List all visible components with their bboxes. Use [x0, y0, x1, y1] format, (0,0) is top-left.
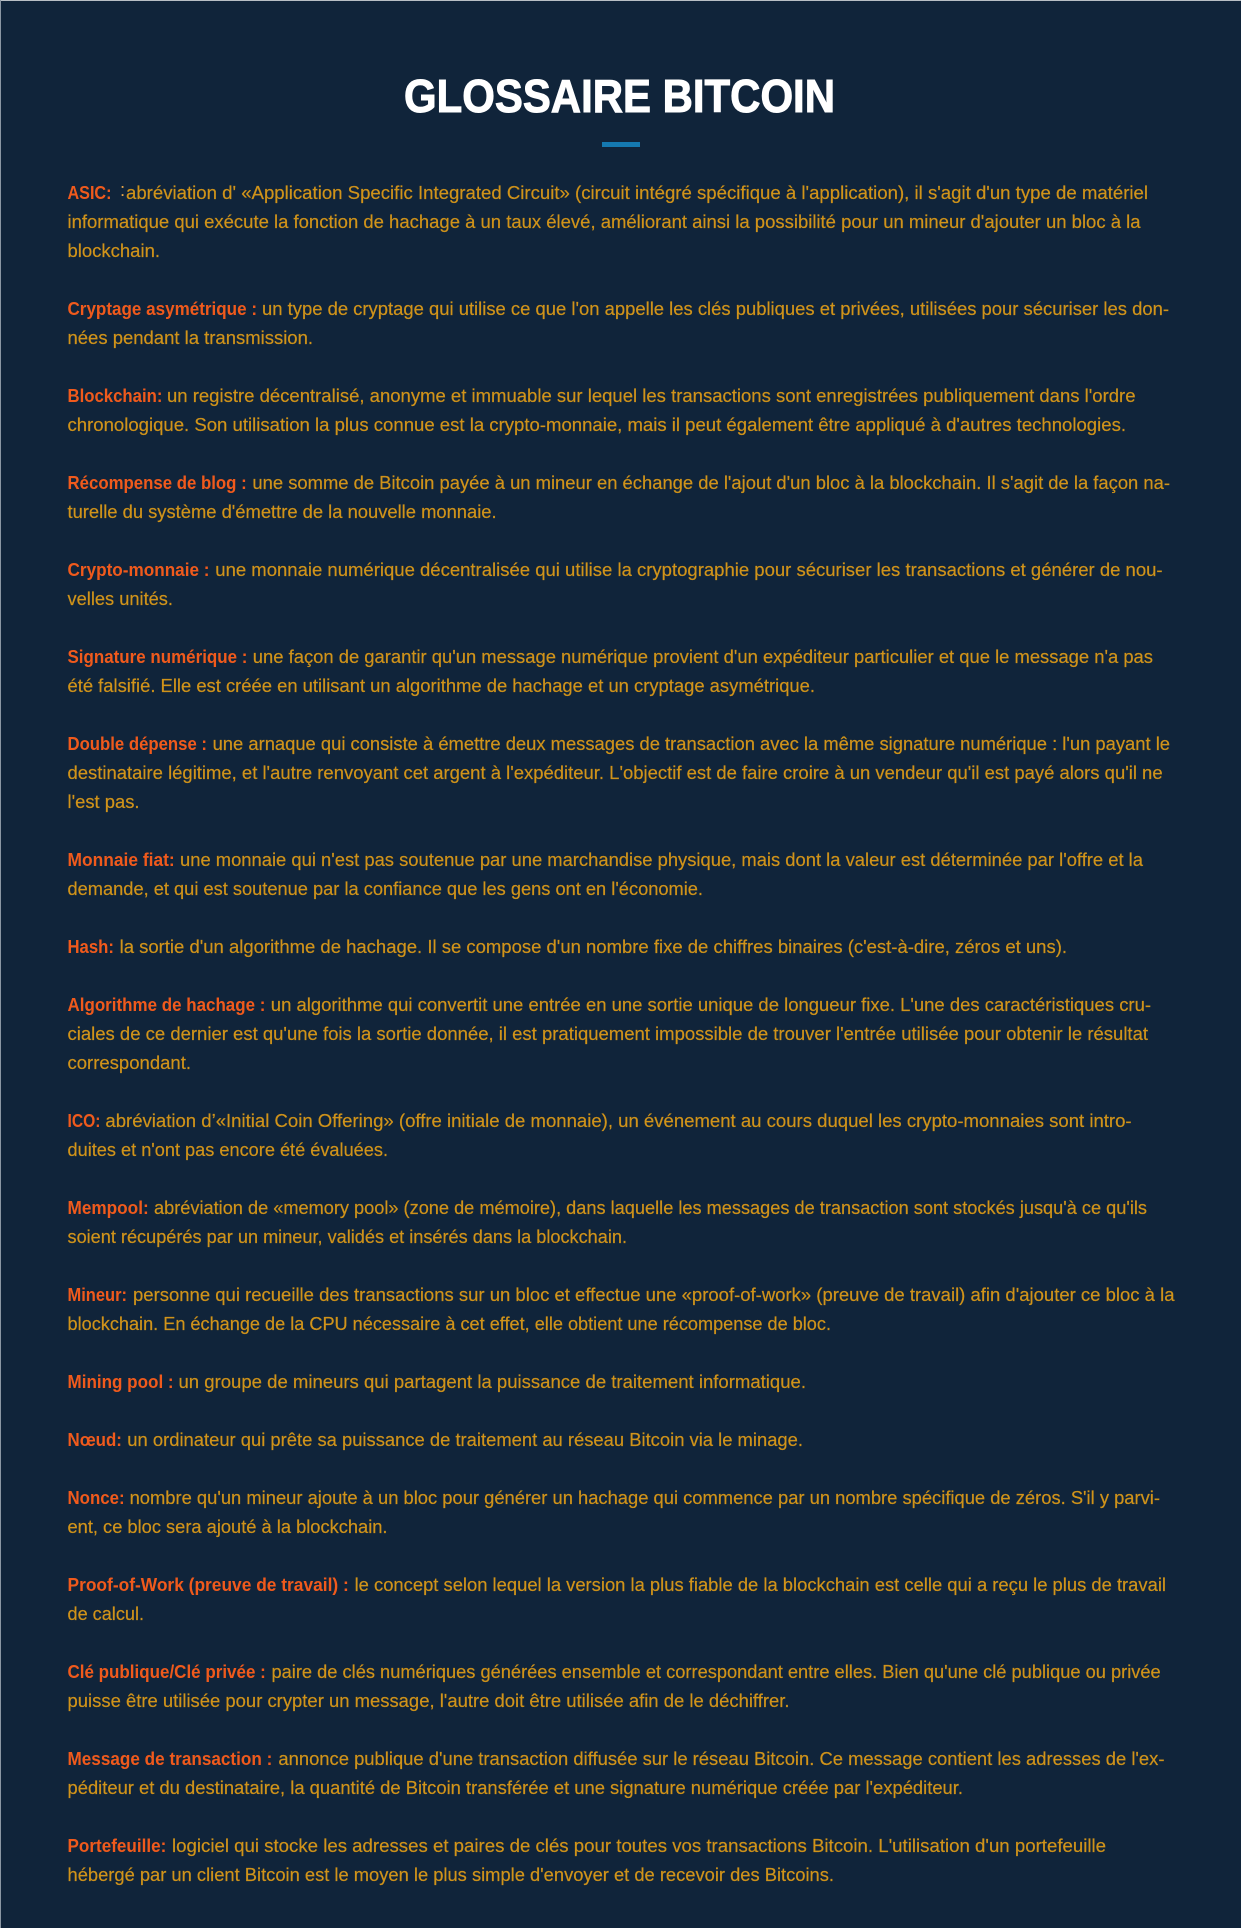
entry: Message de transaction: [68, 1748, 1164, 1798]
definition: Proof-of-Work: [68, 1574, 1166, 1624]
entry: Nœud: [68, 1429, 803, 1450]
definition: Signature numérique: une façon de garantir qu'un message numérique provient d'un expéditeur particulier et que le message n'a pas: [253, 646, 1153, 667]
term: Portefeuille: Portefeuille:: [68, 1835, 166, 1856]
definition: Récompense de blog: une somme de Bitcoin payée à un mineur en échange de l'ajout d'un bloc à la blockchain. Il s'agit de la façon na-: [252, 472, 1170, 493]
entry: Mining pool: [68, 1371, 806, 1392]
definition: Mineur: [68, 1284, 1175, 1334]
definition: Nœud: un ordinateur qui prête sa puissance de traitement au réseau Bitcoin via le minage.: [127, 1429, 803, 1450]
term: Blockchain: Blockchain:: [68, 385, 162, 406]
definition: Clé publique/Clé privée: paire de clés numériques générées ensemble et correspondant entre elles. Bien qu'une clé publique ou privée: [272, 1661, 1161, 1682]
definition: Blockchain: un registre décentralisé, anonyme et immuable sur lequel les transactions sont enregistrées publiquement dans l'ordre: [167, 385, 1136, 406]
term: Cryptage asymétrique: Cryptage asymétrique :: [68, 298, 257, 319]
definition: Récompense de blog: [68, 472, 1170, 522]
definition: Signature numérique: été falsifié. Elle est créée en utilisant un algorithme de hachage et un cryptage asymétrique.: [68, 675, 815, 696]
definition: Blockchain: chronologique. Son utilisation la plus connue est la crypto-monnaie, mais il peut également être appliqué à d'autres technologies.: [68, 414, 1126, 435]
definition: Nonce: ent, ce bloc sera ajouté à la blockchain.: [68, 1516, 388, 1537]
entry: Monnaie fiat: [68, 849, 1144, 899]
definition: ASIC: blockchain.: [68, 240, 160, 261]
definition: Monnaie fiat: une monnaie qui n'est pas soutenue par une marchandise physique, mais dont la valeur est déterminée par l'offre et la: [180, 849, 1144, 870]
definition: Cryptage asymétrique: un type de cryptage qui utilise ce que l'on appelle les clés publiques et privées, utilisées pour sécuriser les don-: [262, 298, 1169, 319]
definition: Portefeuille: [68, 1835, 1106, 1885]
definition: Double dépense: [68, 733, 1170, 812]
entry: Proof-of-Work: [68, 1574, 1166, 1624]
definition: Proof-of-Work: de calcul.: [68, 1603, 144, 1624]
definition: ASIC: abréviation d' «Application Specific Integrated Circuit» (circuit intégré spécifique à l'application), il s'agit d'un type de matériel: [126, 182, 1148, 203]
definition: Message de transaction: annonce publique d'une transaction diffusée sur le réseau Bitcoin. Ce message contient les adresses de l'ex-: [278, 1748, 1164, 1769]
entry: Portefeuille: [68, 1835, 1106, 1885]
entry: ICO: [68, 1110, 1132, 1160]
definition: Signature numérique: [68, 646, 1153, 696]
definition: Cryptage asymétrique: nées pendant la transmission.: [68, 327, 313, 348]
term: Mineur: Mineur:: [68, 1284, 127, 1305]
entry: Blockchain: [68, 385, 1136, 435]
entry: Crypto-monnaie: [68, 559, 1163, 609]
definition: Cryptage asymétrique: [68, 298, 1169, 348]
definition: Hash: la sortie d'un algorithme de hachage. Il se compose d'un nombre fixe de chiffres binaires (c'est-à-dire, zéros et uns).: [120, 936, 1067, 957]
definition: Proof-of-Work: le concept selon lequel la version la plus fiable de la blockchain est celle qui a reçu le plus de travail: [355, 1574, 1166, 1595]
definition: Algorithme de hachage: [68, 994, 1151, 1073]
definition: Blockchain: [68, 385, 1136, 435]
definition: ASIC: :: [120, 179, 125, 200]
definition: Algorithme de hachage: correspondant.: [68, 1052, 191, 1073]
definition: Message de transaction: péditeur et du destinataire, la quantité de Bitcoin transférée et une signature numérique créée par l'expéditeur.: [68, 1777, 963, 1798]
entry: ASIC: [68, 179, 1148, 261]
definition: Monnaie fiat: demande, et qui est soutenue par la confiance que les gens ont en l'économie.: [68, 878, 703, 899]
definition: Mineur: personne qui recueille des transactions sur un bloc et effectue une «proof-of-work» (preuve de travail) afin d'ajouter ce bloc à la: [133, 1284, 1175, 1305]
definition: Mineur: blockchain. En échange de la CPU nécessaire à cet effet, elle obtient une récompense de bloc.: [68, 1313, 831, 1334]
definition: Crypto-monnaie: velles unités.: [68, 588, 173, 609]
definition: Nonce: nombre qu'un mineur ajoute à un bloc pour générer un hachage qui commence par un nombre spécifique de zéros. S'il y parvi-: [130, 1487, 1160, 1508]
term: Nonce: Nonce:: [68, 1487, 125, 1508]
definition: ICO: abréviation d’«Initial Coin Offering» (offre initiale de monnaie), un événement au cours duquel les crypto-monnaies sont intro-: [105, 1110, 1132, 1131]
entry: Cryptage asymétrique: [68, 298, 1169, 348]
entry: Algorithme de hachage: [68, 994, 1151, 1073]
definition: Double dépense: l'est pas.: [68, 791, 140, 812]
definition: Mempool: soient récupérés par un mineur, validés et insérés dans la blockchain.: [68, 1226, 627, 1247]
term: Message de transaction: Message de transaction :: [68, 1748, 272, 1769]
definition: Nonce: [68, 1487, 1160, 1537]
term: Clé publique/Clé privée: Clé publique/Clé privée :: [68, 1661, 266, 1682]
definition: Clé publique/Clé privée: puisse être utilisée pour crypter un message, l'autre doit être utilisée afin de le déchiffrer.: [68, 1690, 790, 1711]
entry: Double dépense: [68, 733, 1170, 812]
term: Signature numérique: Signature numérique :: [68, 646, 247, 667]
definition: Mempool: [68, 1197, 1147, 1247]
term: Mining pool: Mining pool :: [68, 1371, 174, 1392]
entry: Récompense de blog: [68, 472, 1170, 522]
entry: Mineur: [68, 1284, 1175, 1334]
definition: Mining pool: un groupe de mineurs qui partagent la puissance de traitement informatique.: [178, 1371, 806, 1392]
entry: Mempool: [68, 1197, 1147, 1247]
definition: Algorithme de hachage: un algorithme qui convertit une entrée en une sortie unique de longueur fixe. L'une des caractéristiques cru-: [271, 994, 1151, 1015]
definition: Monnaie fiat: [68, 849, 1144, 899]
term: ICO: ICO:: [68, 1110, 100, 1131]
definition: ICO: duites et n'ont pas encore été évaluées.: [68, 1139, 388, 1160]
definition: Portefeuille: hébergé par un client Bitcoin est le moyen le plus simple d'envoyer et de recevoir des Bitcoins.: [68, 1864, 834, 1885]
entry: Nonce: [68, 1487, 1160, 1537]
term: ASIC: ASIC:: [68, 182, 112, 203]
definition: Algorithme de hachage: ciales de ce dernier est qu'une fois la sortie donnée, il est pratiquement impossible de trouver l'entrée utilisée pour obtenir le résultat: [68, 1023, 1148, 1044]
term: Hash: Hash:: [68, 936, 114, 957]
definition: Message de transaction: [68, 1748, 1164, 1798]
definition: Double dépense: destinataire légitime, et l'autre renvoyant cet argent à l'expéditeur. L'objectif est de faire croire à un vendeur qu'il est payé alors qu'il ne: [68, 762, 1163, 783]
definition: ICO: [68, 1110, 1132, 1160]
term: Mempool: Mempool:: [68, 1197, 149, 1218]
title underline accent: [602, 142, 640, 147]
term: Algorithme de hachage: Algorithme de hachage :: [68, 994, 265, 1015]
entry: Signature numérique: [68, 646, 1153, 696]
definition: ASIC: informatique qui exécute la fonction de hachage à un taux élevé, améliorant ainsi la possibilité pour un mineur d'ajouter un bloc à la: [68, 211, 1141, 232]
entry: Clé publique/Clé privée: [68, 1661, 1161, 1711]
entry: Hash: [68, 936, 1067, 957]
definition: Mempool: abréviation de «memory pool» (zone de mémoire), dans laquelle les messages de transaction sont stockés jusqu'à ce qu'ils: [154, 1197, 1147, 1218]
term: Nœud: Nœud:: [68, 1429, 122, 1450]
term: Crypto-monnaie: Crypto-monnaie :: [68, 559, 210, 580]
definition: ASIC: [68, 179, 1148, 261]
definition: Double dépense: une arnaque qui consiste à émettre deux messages de transaction avec la même signature numérique : l'un payant le: [213, 733, 1170, 754]
definition: Récompense de blog: turelle du système d'émettre de la nouvelle monnaie.: [68, 501, 497, 522]
term: Double dépense: Double dépense :: [68, 733, 207, 754]
term: Proof-of-Work: Proof-of-Work (preuve de travail) :: [68, 1574, 349, 1595]
definition: Portefeuille: logiciel qui stocke les adresses et paires de clés pour toutes vos transactions Bitcoin. L'utilisation d'un portefeuille: [172, 1835, 1106, 1856]
definition: Crypto-monnaie: une monnaie numérique décentralisée qui utilise la cryptographie pour sécuriser les transactions et générer de nou-: [215, 559, 1163, 580]
term: Récompense de blog: Récompense de blog :: [68, 472, 247, 493]
definition: Clé publique/Clé privée: [68, 1661, 1161, 1711]
title: GLOSSAIRE BITCOIN: [404, 70, 835, 122]
definition: Crypto-monnaie: [68, 559, 1163, 609]
term: Monnaie fiat: Monnaie fiat:: [68, 849, 175, 870]
